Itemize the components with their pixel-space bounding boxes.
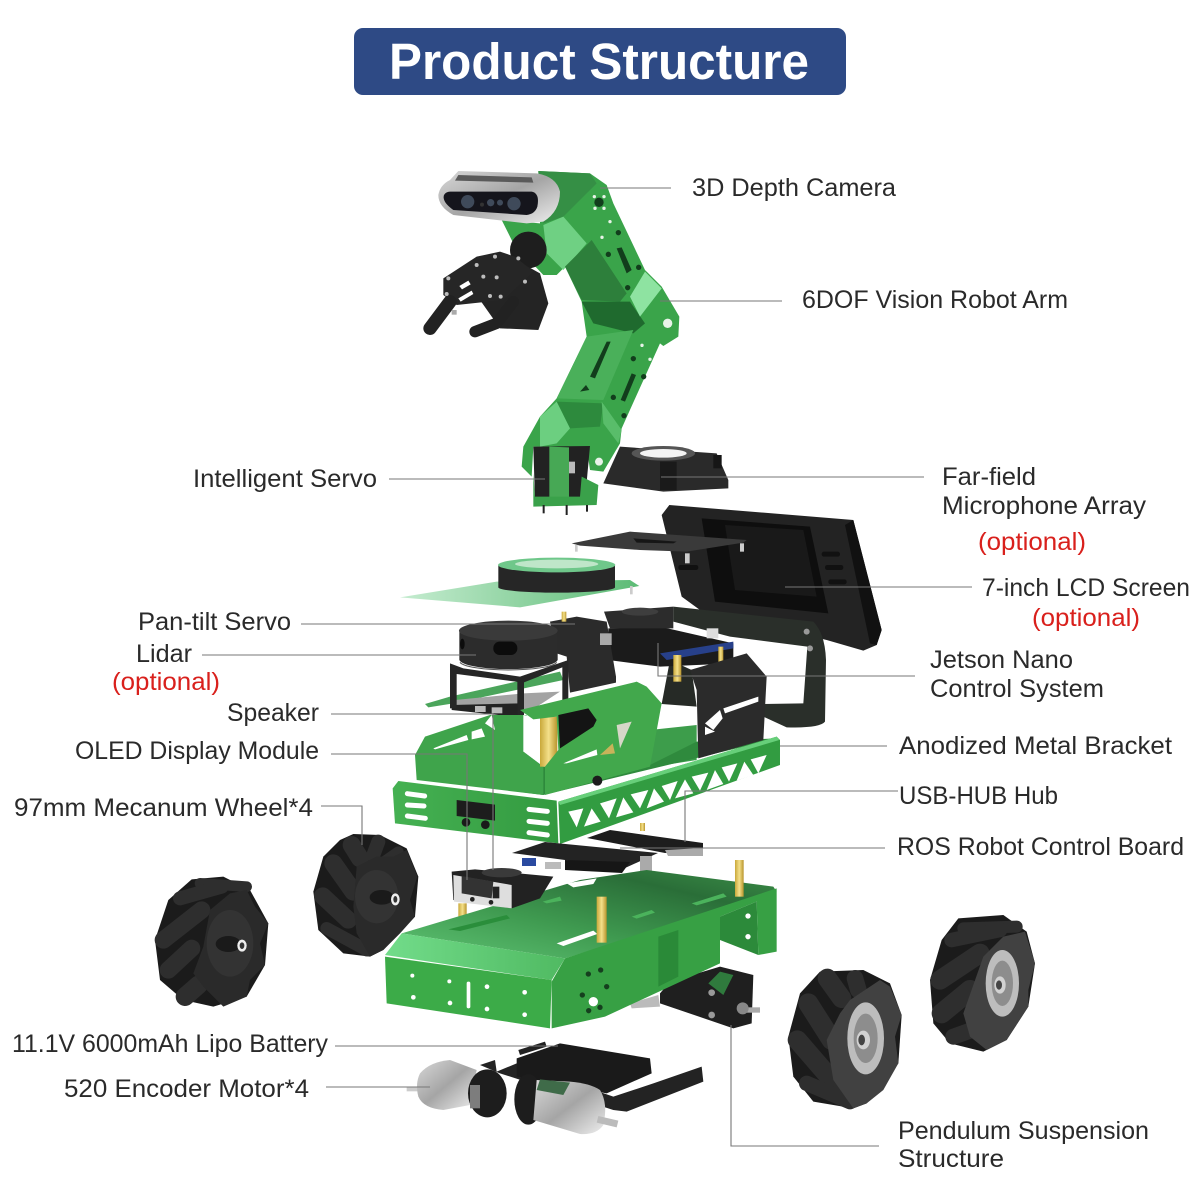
microphone array module bbox=[603, 446, 728, 492]
title banner: Product Structure bbox=[389, 33, 809, 90]
OLED and fan module bbox=[452, 868, 553, 908]
servo at arm base bbox=[533, 446, 598, 515]
encoder motor right bbox=[514, 1074, 618, 1134]
mecanum wheel: far right bbox=[930, 915, 1035, 1052]
label: OLED Display Module: OLED Display Module bbox=[75, 737, 319, 765]
chassis top face bbox=[402, 860, 777, 958]
LCD screen bbox=[662, 505, 882, 651]
label: Far-field Microphone Array: (optional) bbox=[978, 528, 1086, 556]
label: 520 Encoder Motor*4: 520 Encoder Motor*4 bbox=[64, 1075, 309, 1103]
mecanum wheel: far left bbox=[155, 877, 268, 1007]
label: Pendulum Suspension Structure: Pendulum Suspension bbox=[898, 1117, 1149, 1145]
lidar bbox=[425, 621, 568, 717]
black mounting plate bbox=[572, 532, 747, 563]
robot arm with camera, gripper and servo bbox=[430, 171, 728, 515]
middle tier upper components bbox=[400, 505, 882, 727]
encoder motor left bbox=[407, 1060, 507, 1117]
label: Far-field Microphone Array bbox=[661, 463, 1147, 556]
battery tray bbox=[480, 1060, 703, 1112]
label: 6DOF Vision Robot Arm: 6DOF Vision Robot Arm bbox=[802, 286, 1068, 314]
chassis walls bbox=[385, 888, 777, 1028]
label: Lidar bbox=[112, 640, 476, 696]
green upper plate bbox=[520, 682, 662, 795]
mecanum wheel: lower right bbox=[788, 970, 902, 1108]
label: Jetson Nano Control System: Jetson Nano bbox=[930, 646, 1073, 674]
label: Jetson Nano Control System bbox=[658, 643, 1104, 703]
label: Speaker bbox=[227, 699, 493, 870]
label: USB-HUB Hub: USB-HUB Hub bbox=[899, 782, 1058, 810]
label: 97mm Mecanum Wheel*4: 97mm Mecanum Wheel*4 bbox=[14, 794, 313, 822]
pan-tilt servo bbox=[550, 612, 616, 693]
ROS robot control board and USB hub bbox=[512, 823, 703, 876]
anodized metal bracket bbox=[690, 653, 767, 758]
label: Speaker: Speaker bbox=[227, 699, 319, 727]
interior floor and rear green bracket bbox=[415, 715, 778, 795]
3D depth camera bbox=[438, 171, 560, 223]
label: 7-inch LCD Screen: (optional) bbox=[1032, 604, 1140, 632]
lipo battery bbox=[517, 1042, 652, 1093]
arm slots and screws bbox=[580, 198, 646, 418]
label: Lidar: Lidar bbox=[136, 640, 192, 668]
label: Pendulum Suspension Structure: Structure bbox=[898, 1145, 1004, 1173]
label: Far-field Microphone Array: Far-field bbox=[942, 463, 1036, 491]
label: USB-HUB Hub bbox=[685, 782, 1058, 842]
chassis posts bbox=[458, 873, 644, 930]
mecanum wheel: upper left bbox=[313, 834, 418, 957]
label: Anodized Metal Bracket: Anodized Metal Bracket bbox=[899, 732, 1172, 760]
label: Pan-tilt Servo: Pan-tilt Servo bbox=[138, 608, 291, 636]
label: 97mm Mecanum Wheel*4 bbox=[14, 794, 362, 845]
label: ROS Robot Control Board: ROS Robot Control Board bbox=[897, 833, 1184, 861]
bottom chassis bbox=[385, 860, 777, 1028]
label: 11.1V 6000mAh Lipo Battery: 11.1V 6000mAh Lipo Battery bbox=[12, 1030, 328, 1058]
arm green links bbox=[502, 171, 679, 477]
lipo battery and 520 encoder motors bbox=[407, 1042, 703, 1134]
speaker plate and pan-tilt motor bbox=[400, 558, 639, 607]
LCD support bracket bbox=[662, 607, 826, 727]
Jetson Nano control system bbox=[604, 607, 733, 682]
middle green chassis assembly bbox=[393, 653, 780, 844]
label: Pendulum Suspension Structure bbox=[731, 1025, 1149, 1173]
label: 3D Depth Camera: 3D Depth Camera bbox=[692, 174, 896, 202]
joint screw rings bbox=[593, 195, 672, 466]
label: Lidar: (optional) bbox=[112, 668, 220, 696]
label: Far-field Microphone Array: Microphone Array bbox=[942, 492, 1147, 520]
label: OLED Display Module bbox=[75, 737, 467, 880]
label: 7-inch LCD Screen bbox=[785, 574, 1190, 632]
label: Intelligent Servo: Intelligent Servo bbox=[193, 465, 377, 493]
gripper bbox=[430, 232, 548, 332]
pendulum suspension structure bbox=[630, 967, 760, 1028]
label: 7-inch LCD Screen: 7-inch LCD Screen bbox=[982, 574, 1190, 602]
label: Jetson Nano Control System: Control System bbox=[930, 675, 1104, 703]
green chassis shell bbox=[393, 737, 780, 844]
